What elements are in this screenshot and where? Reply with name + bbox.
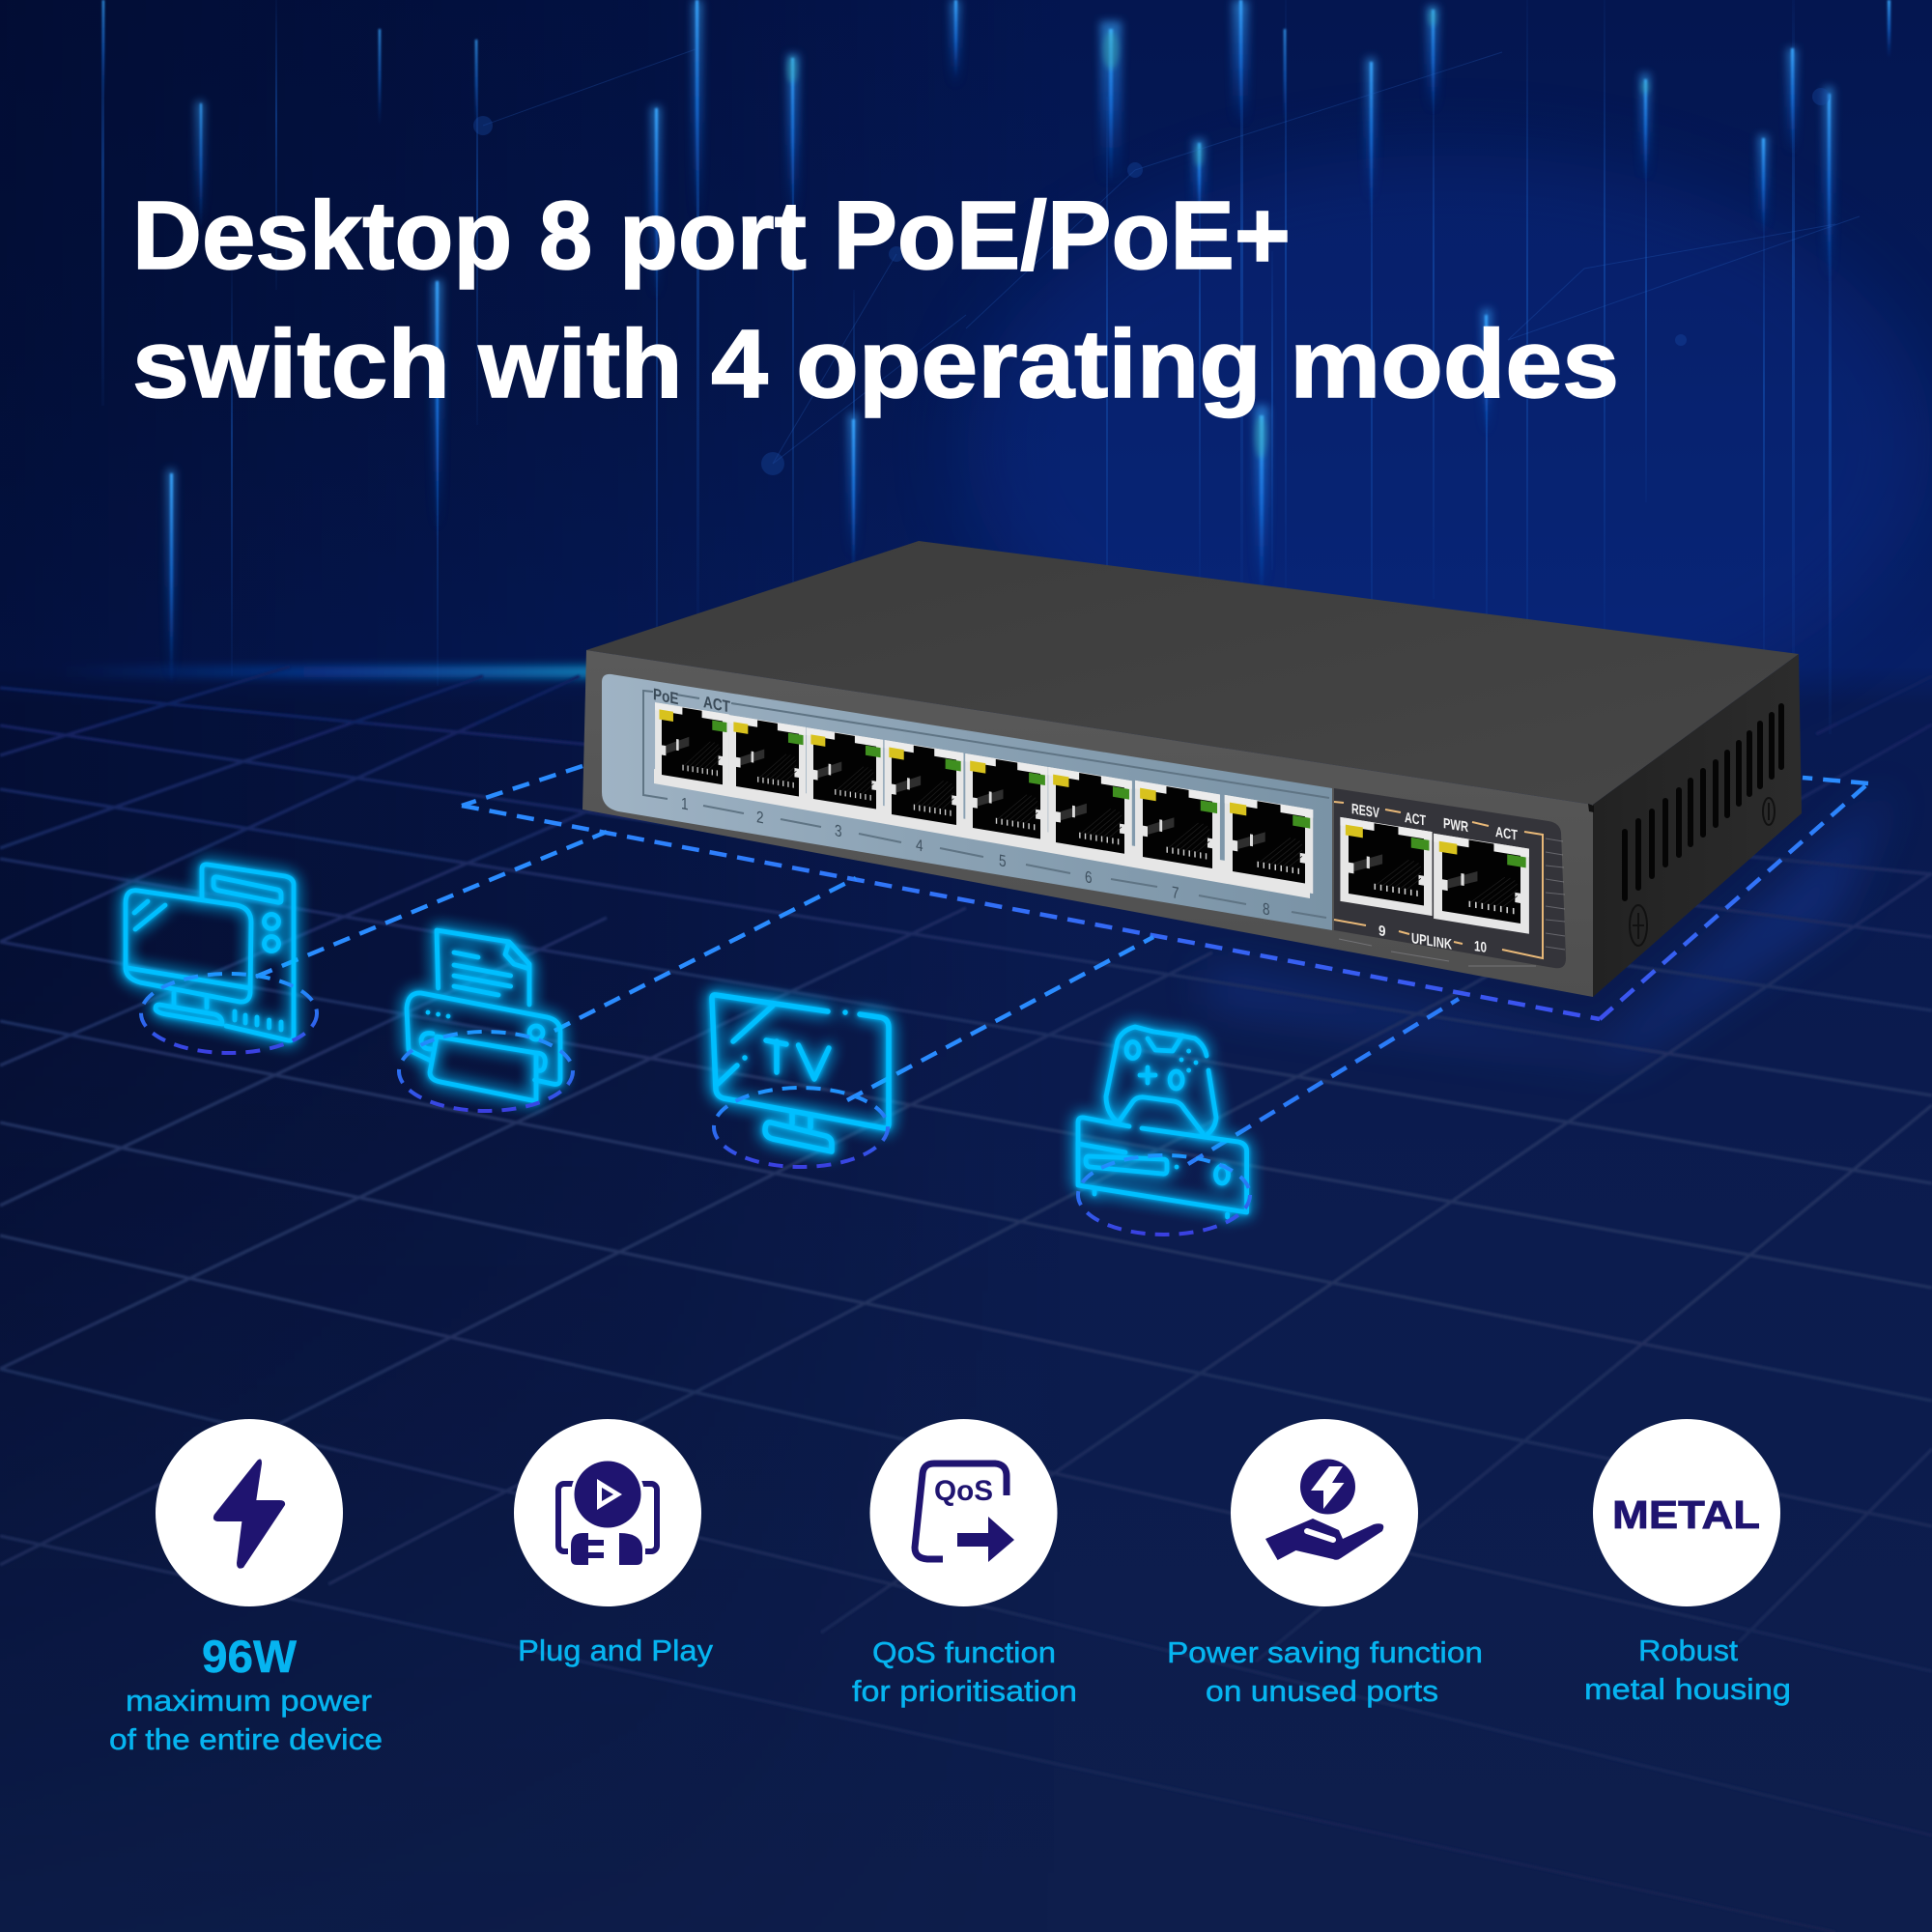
icon: lightning bolt <box>156 1419 343 1606</box>
floor grid <box>0 667 1932 1932</box>
title: Desktop 8 port PoE/PoE+ <box>132 182 1291 290</box>
ACT label: ACT <box>703 694 730 717</box>
icon: METAL badge <box>1593 1419 1780 1606</box>
background light streaks <box>101 0 1890 734</box>
ports 1-8 <box>655 702 1313 894</box>
label: QoS function <box>852 1635 1077 1708</box>
icon: QoS: QoS <box>934 1475 993 1507</box>
front panel: PoE ports <box>602 674 1332 930</box>
icon: hand with energy <box>1231 1419 1418 1606</box>
port numbers 1-8: 1 <box>681 795 689 814</box>
uplink labels: 9 <box>1378 923 1386 941</box>
feature: 96W <box>109 1419 383 1756</box>
uplink labels: UPLINK <box>1411 930 1452 953</box>
label: Power saving function: Power saving function <box>1167 1635 1483 1669</box>
icon: desktop computer <box>126 865 317 1053</box>
label: 96W maximum power: of the entire device <box>109 1722 383 1756</box>
uplink labels: ACT <box>1405 810 1427 830</box>
label: Power saving function <box>1167 1635 1483 1708</box>
label: Robust metal housing: Robust <box>1638 1634 1738 1667</box>
label: QoS function: for prioritisation <box>852 1674 1077 1708</box>
label: 96W maximum power: 96W <box>202 1631 298 1682</box>
icon: game console <box>1078 1027 1250 1235</box>
icon: plug and play <box>514 1419 701 1606</box>
port numbers 1-8 <box>681 795 1270 920</box>
uplink labels: RESV <box>1351 801 1379 822</box>
port numbers 1-8: 4 <box>916 837 923 856</box>
base ring <box>141 974 317 1053</box>
feature: Metal housing <box>1584 1419 1791 1706</box>
port numbers 1-8: 3 <box>835 822 842 841</box>
base ring <box>1078 1155 1250 1235</box>
label: Power saving function: on unused ports <box>1206 1674 1438 1708</box>
label: Robust metal housing: metal housing <box>1584 1672 1791 1706</box>
title <box>132 182 1619 418</box>
icon: QoS <box>869 1419 1057 1606</box>
uplink labels <box>1351 801 1519 956</box>
horizon glow <box>58 667 599 677</box>
label: Plug and Play: Plug and Play <box>518 1634 714 1667</box>
port numbers 1-8: 6 <box>1085 868 1093 888</box>
feature: Power saving <box>1167 1419 1483 1708</box>
white port strip <box>654 769 1310 898</box>
feature: Plug and Play <box>514 1419 714 1667</box>
dashed connection lines <box>256 766 1868 1164</box>
front panel: uplink ports <box>1334 788 1566 968</box>
port numbers 1-8: 7 <box>1172 884 1179 903</box>
port numbers 1-8: 2 <box>756 809 764 828</box>
uplink labels: PWR <box>1443 815 1468 836</box>
side screws <box>1630 798 1775 946</box>
port numbers 1-8: 8 <box>1263 900 1270 920</box>
base ring <box>399 1032 573 1111</box>
port numbers 1-8: 5 <box>999 852 1007 871</box>
switch body: side face <box>1593 654 1802 997</box>
label: 96W maximum power <box>109 1631 383 1756</box>
corner notch <box>1588 804 1594 812</box>
uplink labels: 10 <box>1474 938 1487 956</box>
base ring <box>714 1088 888 1167</box>
icon: television <box>712 995 889 1167</box>
PoE label: PoE <box>653 686 678 709</box>
feature: QoS function <box>852 1419 1077 1708</box>
network switch <box>582 541 1802 997</box>
switch body: top face <box>586 541 1799 805</box>
label: Robust metal housing <box>1584 1634 1791 1706</box>
icon: printer <box>399 930 573 1111</box>
label: QoS function: QoS function <box>872 1635 1056 1669</box>
switch body: front face <box>582 650 1593 997</box>
icon: METAL badge: METAL <box>1612 1492 1760 1537</box>
side ventilation slots <box>1625 706 1781 898</box>
label: 96W maximum power: maximum power <box>126 1684 372 1718</box>
title: switch with 4 operating modes <box>132 310 1619 418</box>
uplink labels: ACT <box>1495 824 1519 844</box>
